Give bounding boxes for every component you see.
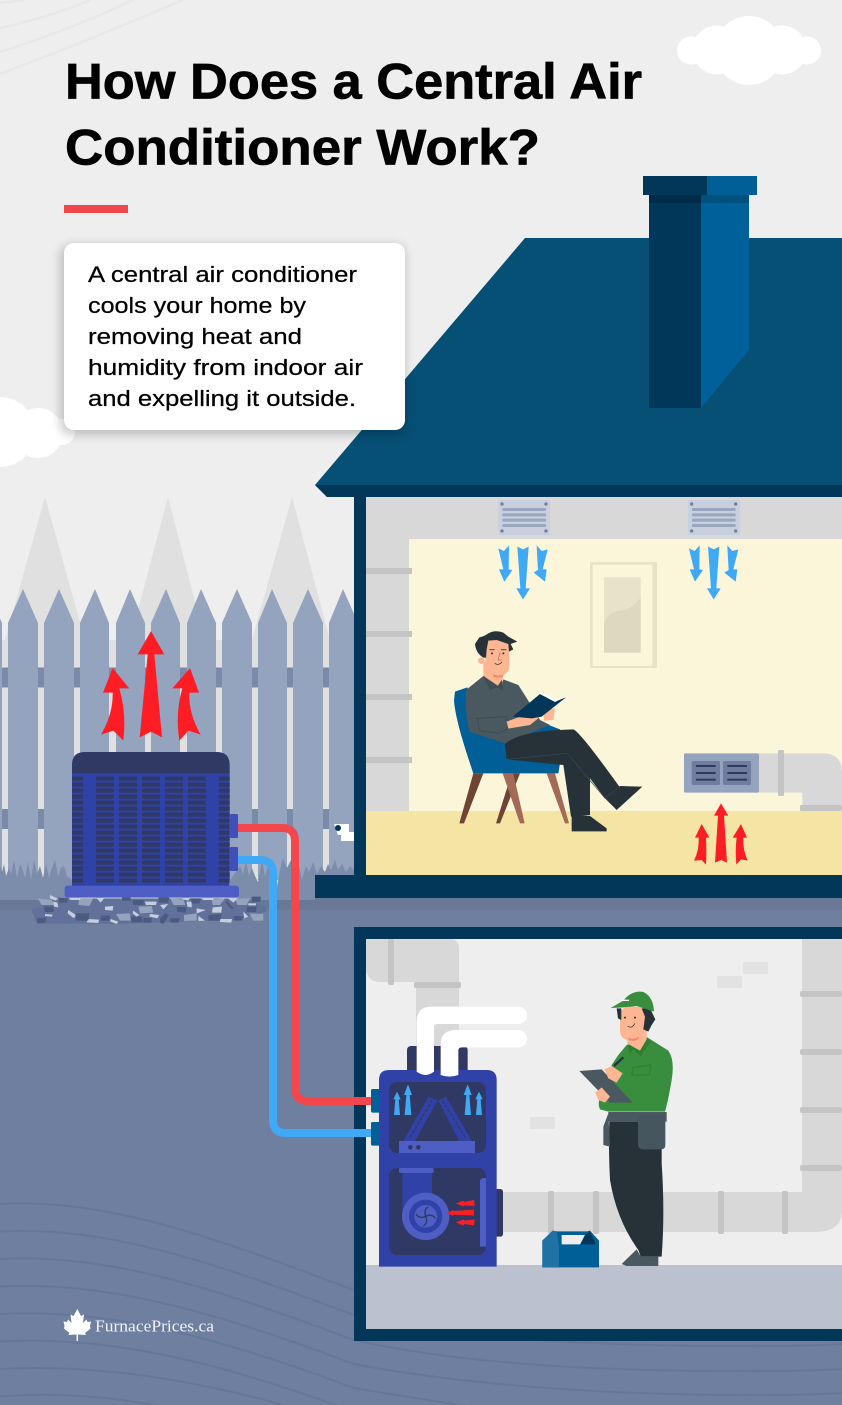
intro text card: cools your home by — [88, 293, 306, 318]
intro text card: removing heat and — [88, 324, 302, 349]
ceiling vent left — [498, 500, 550, 535]
wall bricks — [530, 962, 768, 1129]
basement ducts — [366, 939, 842, 1234]
fence — [0, 589, 358, 880]
trees behind fence — [0, 497, 354, 880]
red warm air arrows — [694, 803, 748, 865]
ceiling vent right — [688, 500, 740, 535]
red hot air arrows above unit — [101, 631, 201, 741]
intro text card: A central air conditioner — [88, 262, 357, 287]
toolbox — [542, 1231, 599, 1267]
AC details — [65, 631, 239, 898]
flue pipes — [417, 1007, 527, 1077]
intro text card — [64, 243, 405, 430]
ground — [0, 900, 842, 1405]
slab shadow — [315, 898, 842, 902]
refrigerant pipe blue — [236, 860, 372, 1133]
upper room — [366, 497, 842, 875]
gravel — [32, 895, 267, 924]
blue cold air arrows left — [498, 545, 548, 599]
logo: FurnacePrices.ca — [95, 1316, 214, 1336]
intro card shadow — [60, 245, 405, 435]
maple leaf — [64, 1309, 91, 1341]
return duct — [684, 750, 842, 811]
title — [65, 54, 642, 176]
intro text card: humidity from indoor air — [88, 355, 363, 380]
logo — [64, 1309, 214, 1341]
house left wall and floor slab — [315, 497, 842, 898]
cloud: top right — [677, 16, 821, 85]
technician — [579, 992, 673, 1266]
outdoor faucet — [334, 824, 354, 841]
refrigerant pipe red — [236, 828, 372, 1101]
person reading in armchair — [454, 631, 642, 831]
title: Conditioner Work? — [65, 120, 540, 176]
room details (vents, picture, arrows) — [454, 500, 842, 865]
furnace and technician — [371, 992, 673, 1267]
blue cold air arrows right — [689, 545, 738, 599]
intro text card: and expelling it outside. — [88, 386, 356, 411]
basement room — [354, 927, 842, 1341]
chimney — [643, 176, 757, 408]
title accent bar — [64, 205, 128, 213]
cloud: left — [0, 397, 75, 467]
title: How Does a Central Air — [65, 54, 642, 110]
grass — [0, 858, 354, 902]
wall picture — [590, 562, 657, 668]
house roof — [315, 238, 842, 497]
furnace — [371, 1046, 503, 1267]
faucet knob — [335, 825, 341, 831]
AC condenser unit — [65, 752, 239, 898]
